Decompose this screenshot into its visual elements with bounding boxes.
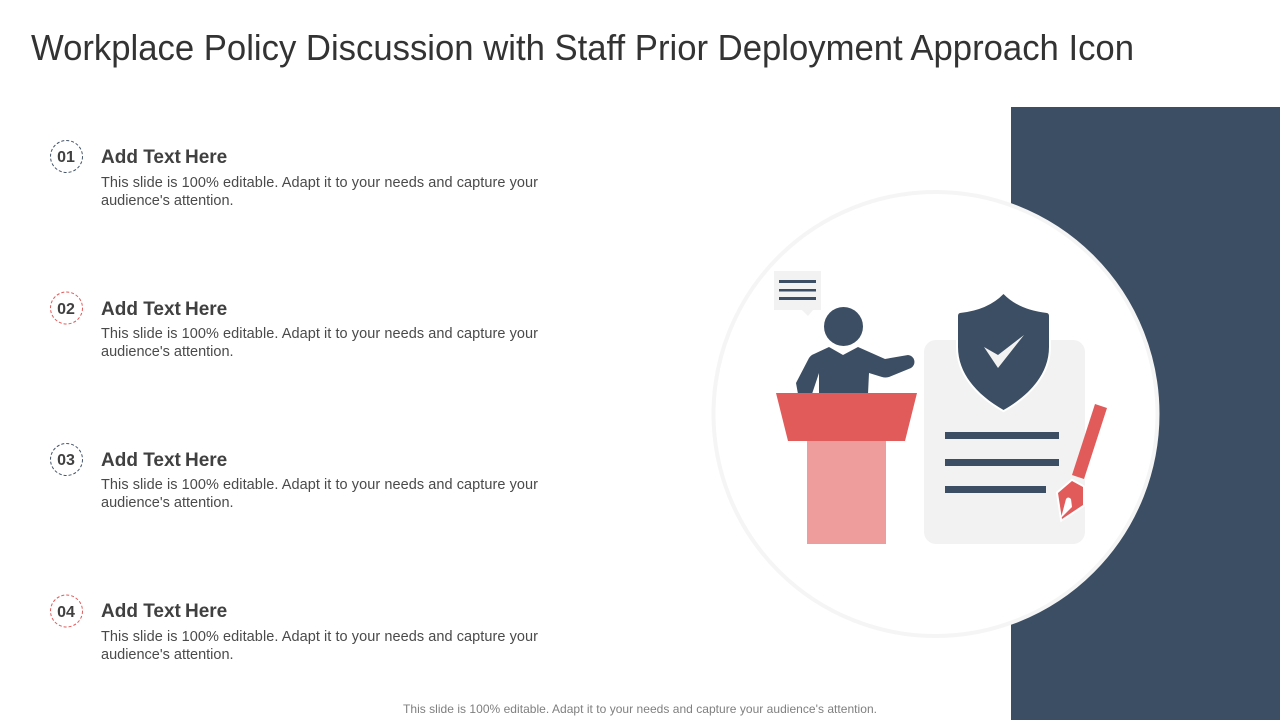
icon: fountain pen <box>1058 404 1107 519</box>
heading 01: Add Text <box>101 147 181 168</box>
body text 04: This slide is 100% editable. Adapt it to your needs and capture your <box>101 629 538 645</box>
body text 01: audience's attention. <box>101 193 234 209</box>
number badge 01 <box>50 140 82 172</box>
footer note: This slide is 100% editable. Adapt it to your needs and capture your audience's attention. <box>403 702 877 716</box>
item 02 <box>50 292 538 360</box>
item 04 <box>50 595 538 663</box>
body text 01 <box>101 175 538 209</box>
icon: speech bubble <box>774 271 821 316</box>
podium column <box>807 441 886 544</box>
heading 03: Add Text <box>101 450 181 471</box>
title: Workplace Policy Discussion with Staff Prior Deployment Approach Icon <box>31 27 1134 68</box>
speaker head <box>824 307 863 346</box>
body text 03: This slide is 100% editable. Adapt it to your needs and capture your <box>101 477 538 493</box>
body text 02: This slide is 100% editable. Adapt it to your needs and capture your <box>101 326 538 342</box>
panel: white circle <box>714 192 1158 636</box>
number badge 04: 04 <box>57 604 75 621</box>
body text 02: audience's attention. <box>101 344 234 360</box>
icon: speaker at podium <box>776 307 917 544</box>
number badge 03 <box>50 444 82 476</box>
item 01 <box>50 140 538 209</box>
body text 03: audience's attention. <box>101 495 234 511</box>
podium top <box>776 393 917 441</box>
body text 04 <box>101 629 538 663</box>
number badge 01: 01 <box>57 149 75 166</box>
item 03 <box>50 444 538 511</box>
body text 04: audience's attention. <box>101 647 234 663</box>
heading 03: Here <box>185 450 227 471</box>
body text 01: This slide is 100% editable. Adapt it to your needs and capture your <box>101 175 538 191</box>
icon: shield with check <box>958 294 1049 410</box>
icon: policy document <box>924 340 1085 544</box>
heading 04: Here <box>185 601 227 622</box>
heading 02: Here <box>185 299 227 320</box>
document sheet <box>924 340 1085 544</box>
speaker body <box>796 347 914 394</box>
panel: dark side band <box>1011 107 1280 720</box>
body text 02 <box>101 326 538 360</box>
heading 01: Here <box>185 147 227 168</box>
body text 03 <box>101 477 538 511</box>
number badge 03: 03 <box>57 452 75 469</box>
heading 04: Add Text <box>101 601 181 622</box>
number badge 02 <box>50 292 82 324</box>
number badge 04 <box>50 595 82 627</box>
number badge 02: 02 <box>57 301 75 318</box>
heading 02: Add Text <box>101 299 181 320</box>
document lines <box>945 432 1059 493</box>
